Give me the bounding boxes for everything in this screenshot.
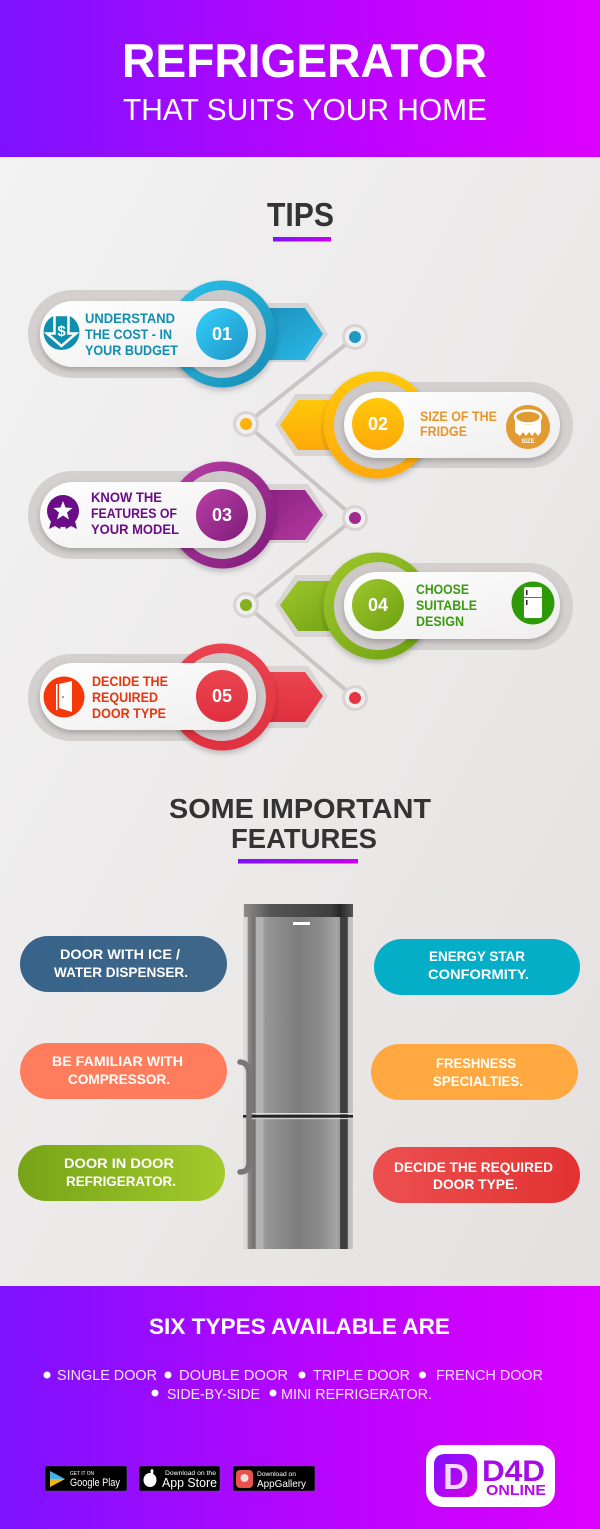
- badge: app store: App Store: [162, 1475, 217, 1490]
- badge: app store: [139, 1466, 220, 1491]
- label: [416, 581, 477, 629]
- label: YOUR BUDGET: [85, 342, 178, 358]
- number 04: 04: [368, 595, 388, 615]
- feature pill: door with ice: WATER DISPENSER.: [54, 964, 188, 980]
- icon: award badge: [47, 495, 79, 529]
- label: FRIDGE: [420, 423, 467, 439]
- badge: app gallery: Download on: [257, 1472, 296, 1478]
- background panel: [0, 157, 600, 1286]
- list of fridge types: [44, 1367, 543, 1403]
- header band: [0, 0, 600, 157]
- badge: google play: GET IT ON: [70, 1471, 94, 1477]
- feature pill: compressor: COMPRESSOR.: [68, 1071, 170, 1087]
- label: DESIGN: [416, 613, 464, 629]
- feature pill: door with ice: [20, 936, 227, 992]
- logo: D4D online: D: [443, 1456, 469, 1497]
- heading: tips: TIPS: [267, 196, 334, 233]
- feature pill: door with ice: DOOR WITH ICE /: [60, 946, 180, 962]
- label: CHOOSE: [416, 581, 469, 597]
- feature pill: door type: [373, 1147, 580, 1203]
- tip 03: [28, 462, 328, 568]
- list of fridge types: SINGLE DOOR: [57, 1367, 157, 1384]
- tip 01: [28, 280, 328, 388]
- label: [85, 310, 178, 358]
- icon: money down arrow: $: [57, 323, 66, 340]
- badge: app gallery: [233, 1466, 315, 1491]
- list of fridge types: MINI REFRIGERATOR.: [281, 1386, 432, 1403]
- badge: google play: [45, 1466, 127, 1491]
- label: THE COST - IN: [85, 326, 172, 342]
- feature pill: door in door: DOOR IN DOOR: [64, 1155, 174, 1171]
- label: DECIDE THE: [92, 673, 168, 689]
- logo: D4D online: [426, 1445, 555, 1507]
- label: YOUR MODEL: [91, 521, 179, 537]
- feature pill: door in door: REFRIGERATOR.: [66, 1173, 176, 1189]
- feature pill: energy star: CONFORMITY.: [428, 966, 529, 982]
- connector line with dots: [233, 324, 368, 711]
- footer band: [0, 1286, 600, 1529]
- feature pill: compressor: BE FAMILIAR WITH: [52, 1053, 183, 1069]
- refrigerator illustration: [240, 904, 353, 1249]
- heading: some important features: [169, 793, 431, 864]
- icon: money down arrow: [44, 314, 80, 350]
- label: REQUIRED: [92, 689, 158, 705]
- list of fridge types: TRIPLE DOOR: [313, 1367, 410, 1384]
- subtitle: THAT SUITS YOUR HOME: [123, 93, 487, 127]
- label: UNDERSTAND: [85, 310, 175, 326]
- feature pill: door type: DOOR TYPE.: [433, 1176, 518, 1192]
- number 03: 03: [212, 505, 232, 525]
- footer heading: SIX TYPES AVAILABLE ARE: [149, 1314, 450, 1339]
- feature pill: freshness: FRESHNESS: [436, 1055, 516, 1071]
- badge: app gallery: AppGallery: [257, 1478, 307, 1490]
- feature pill: compressor: [20, 1043, 227, 1099]
- number 01: 01: [212, 324, 232, 344]
- label: DOOR TYPE: [92, 705, 166, 721]
- feature pill: door type: DECIDE THE REQUIRED: [394, 1159, 553, 1175]
- feature pill: energy star: [374, 939, 580, 995]
- number 05: 05: [212, 686, 232, 706]
- icon: door: [44, 676, 84, 718]
- list of fridge types: SIDE-BY-SIDE: [167, 1386, 260, 1403]
- heading: some important features: FEATURES: [231, 823, 377, 854]
- label: SUITABLE: [416, 597, 477, 613]
- label: [92, 673, 168, 721]
- feature pill: freshness: [371, 1044, 578, 1100]
- icon: tape measure: [506, 405, 550, 449]
- list of fridge types: FRENCH DOOR: [436, 1367, 543, 1384]
- label: [91, 489, 179, 537]
- feature pill: freshness: SPECIALTIES.: [433, 1073, 523, 1089]
- list of fridge types: DOUBLE DOOR: [179, 1367, 288, 1384]
- heading: some important features: SOME IMPORTANT: [169, 793, 431, 824]
- label: FEATURES OF: [91, 505, 177, 521]
- feature pill: energy star: ENERGY STAR: [429, 948, 525, 964]
- logo: D4D online: D4D: [482, 1455, 545, 1488]
- feature pill: door in door: [18, 1145, 225, 1201]
- label: [420, 408, 497, 439]
- title: REFRIGERATOR: [122, 34, 487, 87]
- icon: tape measure: SIZE: [521, 439, 535, 445]
- tip 05: [28, 644, 328, 750]
- badge: google play: Google Play: [70, 1477, 120, 1489]
- label: SIZE OF THE: [420, 408, 497, 424]
- tip 02: [275, 372, 573, 478]
- badge: app store: Download on the: [165, 1471, 217, 1477]
- number 02: 02: [368, 414, 388, 434]
- tip 04: [275, 552, 573, 660]
- label: KNOW THE: [91, 489, 162, 505]
- logo: D4D online: ONLINE: [486, 1482, 546, 1499]
- icon: fridge: [512, 582, 554, 624]
